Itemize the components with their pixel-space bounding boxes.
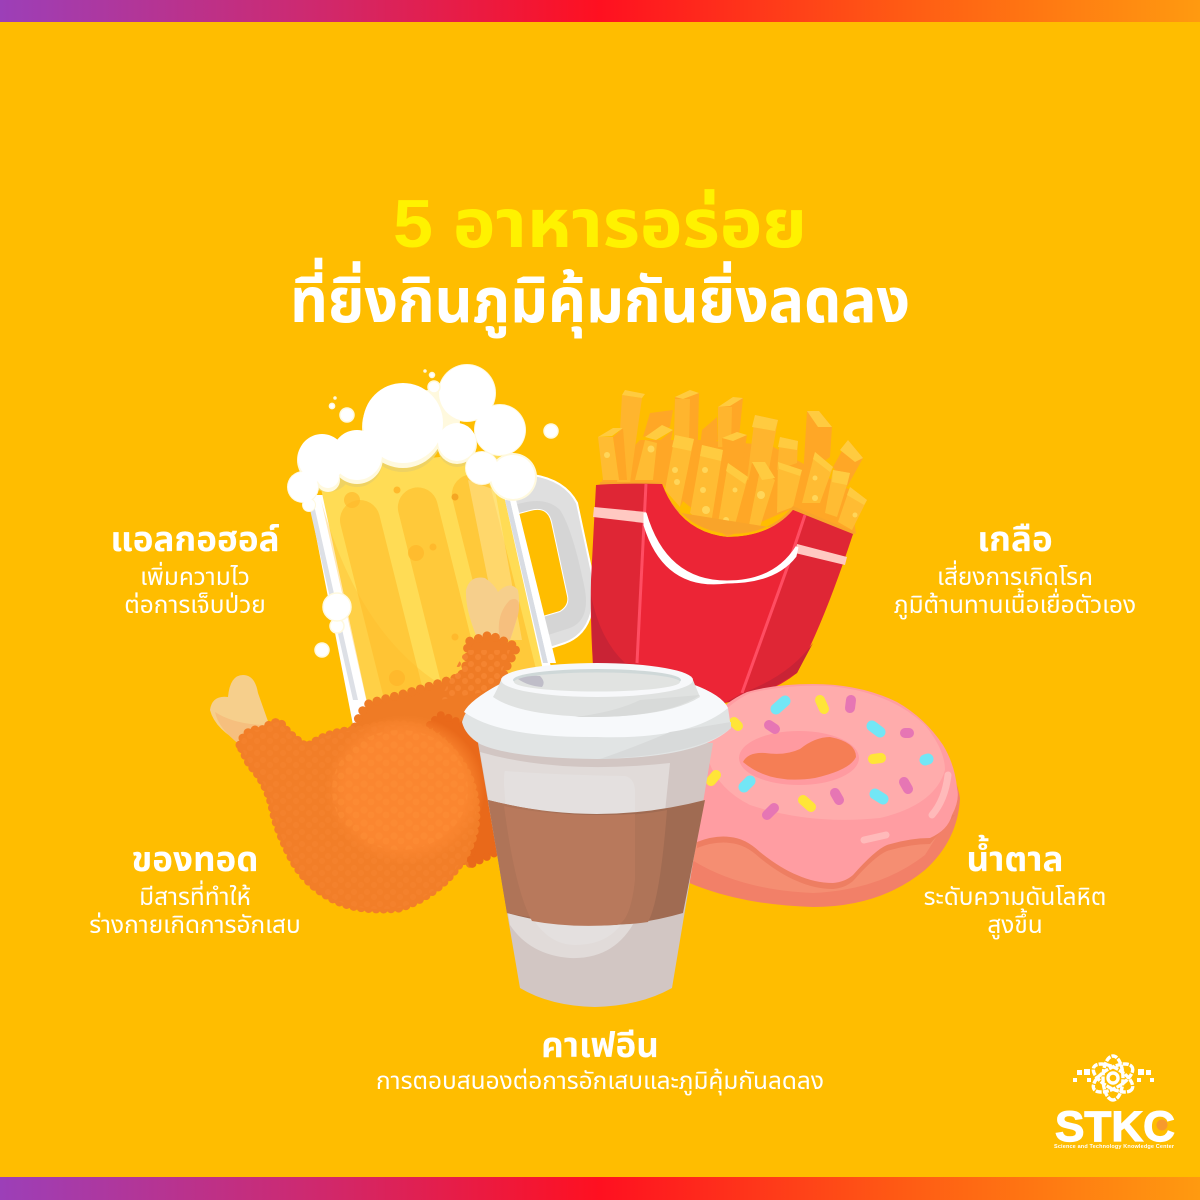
top gradient bar — [0, 0, 1200, 22]
label: alcohol: แอลกอฮอล์ — [110, 520, 280, 559]
coffee sleeve — [488, 800, 705, 926]
lid brim — [462, 684, 731, 759]
logo: STKC: Science and Technology Knowledge Center — [1054, 1144, 1175, 1150]
logo: STKC: STKC — [1055, 1103, 1175, 1151]
label: fried food — [89, 840, 301, 939]
illustration: french fries — [591, 390, 867, 703]
illustration: fried chicken — [210, 578, 519, 909]
fries backing mass — [600, 440, 856, 537]
back drumstick bone — [466, 578, 519, 640]
label: salt: ภูมิต้านทานเนื้อเยื่อตัวเอง — [894, 588, 1136, 620]
label: salt: เสี่ยงการเกิดโรค — [937, 560, 1093, 591]
label: sugar: ระดับความดันโลหิต — [924, 884, 1106, 911]
label: sugar: น้ำตาล — [967, 834, 1063, 879]
label: alcohol: ต่อการเจ็บป่วย — [124, 591, 266, 619]
mug glass and beer — [308, 450, 566, 738]
label: fried food: ของทอด — [132, 840, 258, 879]
label: sugar: สูงขึ้น — [987, 908, 1043, 940]
label: fried food: มีสารที่ทำให้ — [139, 880, 251, 911]
title: ที่ยิ่งกินภูมิคุ้มกันยิ่งลดลง — [290, 257, 910, 339]
mug handle — [505, 475, 593, 648]
label: salt: เกลือ — [977, 520, 1053, 559]
donut hole — [739, 731, 859, 785]
illustration: coffee cup — [462, 663, 731, 1007]
title — [290, 186, 910, 339]
lid top — [493, 680, 700, 717]
label: fried food: ร่างกายเกิดการอักเสบ — [89, 911, 301, 939]
front row of fries — [598, 425, 867, 532]
logo: STKC — [1054, 1056, 1175, 1151]
front drumstick bone — [210, 675, 270, 745]
label: alcohol — [110, 520, 280, 619]
label: caffeine: การตอบสนองต่อการอักเสบและภูมิคุ้มกันลดลง — [376, 1067, 824, 1096]
label: caffeine: คาเฟอีน — [541, 1026, 659, 1065]
sprinkles — [711, 700, 928, 815]
back drumstick — [355, 635, 517, 865]
logo atom icon — [1089, 1056, 1137, 1100]
illustration: donut — [687, 684, 960, 907]
label: alcohol: เพิ่มความไว — [140, 561, 250, 591]
label: salt — [894, 520, 1136, 620]
label: caffeine — [376, 1026, 824, 1096]
back row of fries — [617, 390, 863, 487]
fries carton — [591, 482, 855, 703]
bottom gradient bar — [0, 1177, 1200, 1200]
icing — [695, 684, 958, 883]
front drumstick — [240, 715, 485, 909]
title: 5 อาหารอร่อย — [393, 186, 807, 262]
lid sip hole — [518, 676, 544, 687]
cup body — [478, 743, 713, 1007]
foam — [287, 364, 558, 657]
label: sugar — [924, 834, 1106, 940]
illustration: beer mug — [287, 364, 593, 738]
